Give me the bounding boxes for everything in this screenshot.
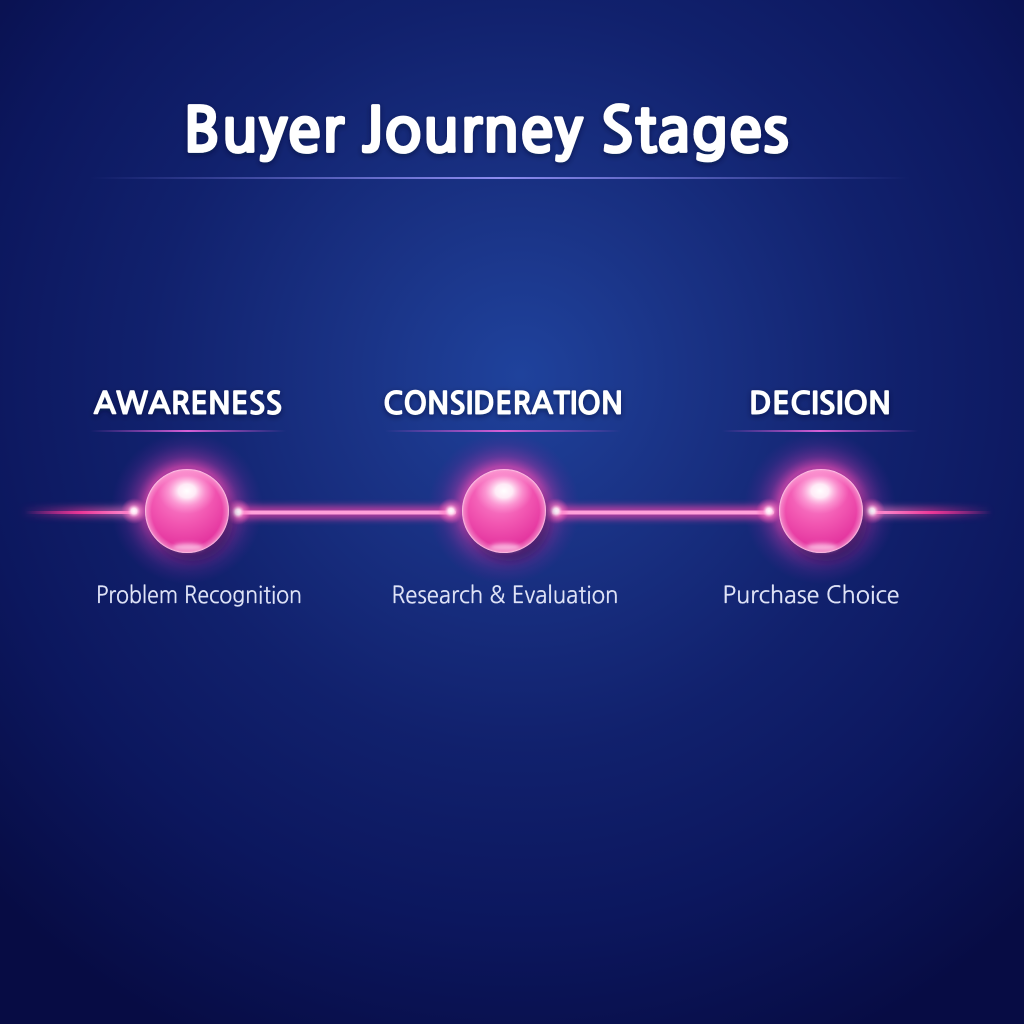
node halo: decision (744, 432, 896, 584)
stage heading: consideration: CONSIDERATION (383, 388, 623, 419)
label: research and evaluation: Research & Evaluation (392, 584, 618, 607)
node: decision (779, 468, 867, 561)
node halo: awareness (111, 432, 263, 584)
stage heading: awareness: AWARENESS (94, 388, 282, 419)
timeline connector (20, 498, 993, 525)
node halo: consideration (428, 432, 580, 584)
node: consideration (462, 468, 550, 561)
stage heading: decision: DECISION (749, 388, 891, 419)
label: problem recognition: Problem Recognition (96, 584, 302, 607)
label: purchase choice: Purchase Choice (722, 584, 900, 607)
node: awareness (145, 468, 233, 561)
title: Buyer Journey Stages (183, 101, 789, 162)
title underline (90, 177, 910, 179)
